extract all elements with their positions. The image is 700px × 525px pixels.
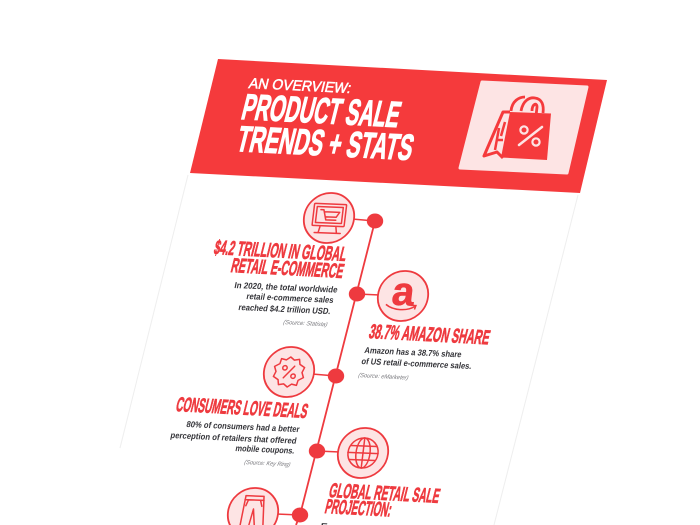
- description: [234, 280, 339, 316]
- description: reached $4.2 trillion USD.: [238, 302, 332, 316]
- heading: PROJECTION:: [323, 496, 394, 521]
- stat: global retail sale projection: [320, 480, 442, 525]
- source: (Source: eMarketer): [358, 372, 409, 382]
- stat: 4.2 trillion: [212, 237, 349, 328]
- description: [170, 419, 301, 456]
- icon: monitor with shopping cart: [301, 192, 357, 244]
- source: (Source: Statista): [283, 319, 328, 328]
- icon: shopping bag: [460, 82, 587, 173]
- stat: consumers love deals: [170, 394, 310, 468]
- heading: 38.7% AMAZON SHARE: [367, 321, 492, 349]
- icon: discount badge: [261, 346, 317, 398]
- heading: $4.2 TRILLION IN GLOBAL: [212, 237, 349, 266]
- heading: CONSUMERS LOVE DEALS: [174, 394, 310, 423]
- description: perception of retailers that offered: [170, 430, 298, 446]
- infographic card: [120, 175, 578, 525]
- description: In 2020, the total worldwide: [234, 280, 339, 295]
- icon: amazon logo: a: [390, 269, 418, 314]
- icon: globe: [335, 427, 391, 479]
- description: of US retail e-commerce sales.: [361, 356, 473, 371]
- heading: RETAIL E-COMMERCE: [229, 255, 346, 283]
- heading: GLOBAL RETAIL SALE: [327, 480, 442, 508]
- description: [361, 345, 473, 371]
- source: (Source: Key Ring): [244, 459, 291, 468]
- main title: [233, 87, 418, 168]
- stat: amazon share: [358, 321, 492, 382]
- header banner: [190, 59, 607, 193]
- main title: PRODUCT SALE: [238, 87, 405, 135]
- description: retail e-commerce sales: [246, 291, 335, 305]
- icon: amazon logo: [375, 268, 431, 322]
- small title: AN OVERVIEW:: [247, 76, 353, 97]
- heading: [212, 237, 349, 283]
- icon: pants: [225, 487, 281, 525]
- main title: TRENDS + STATS: [233, 119, 418, 168]
- timeline: [276, 214, 383, 525]
- description: 80% of consumers had a better: [186, 419, 301, 434]
- heading: [323, 480, 442, 521]
- description: Amazon has a 38.7% share: [364, 345, 463, 359]
- description: mobile coupons.: [235, 443, 296, 456]
